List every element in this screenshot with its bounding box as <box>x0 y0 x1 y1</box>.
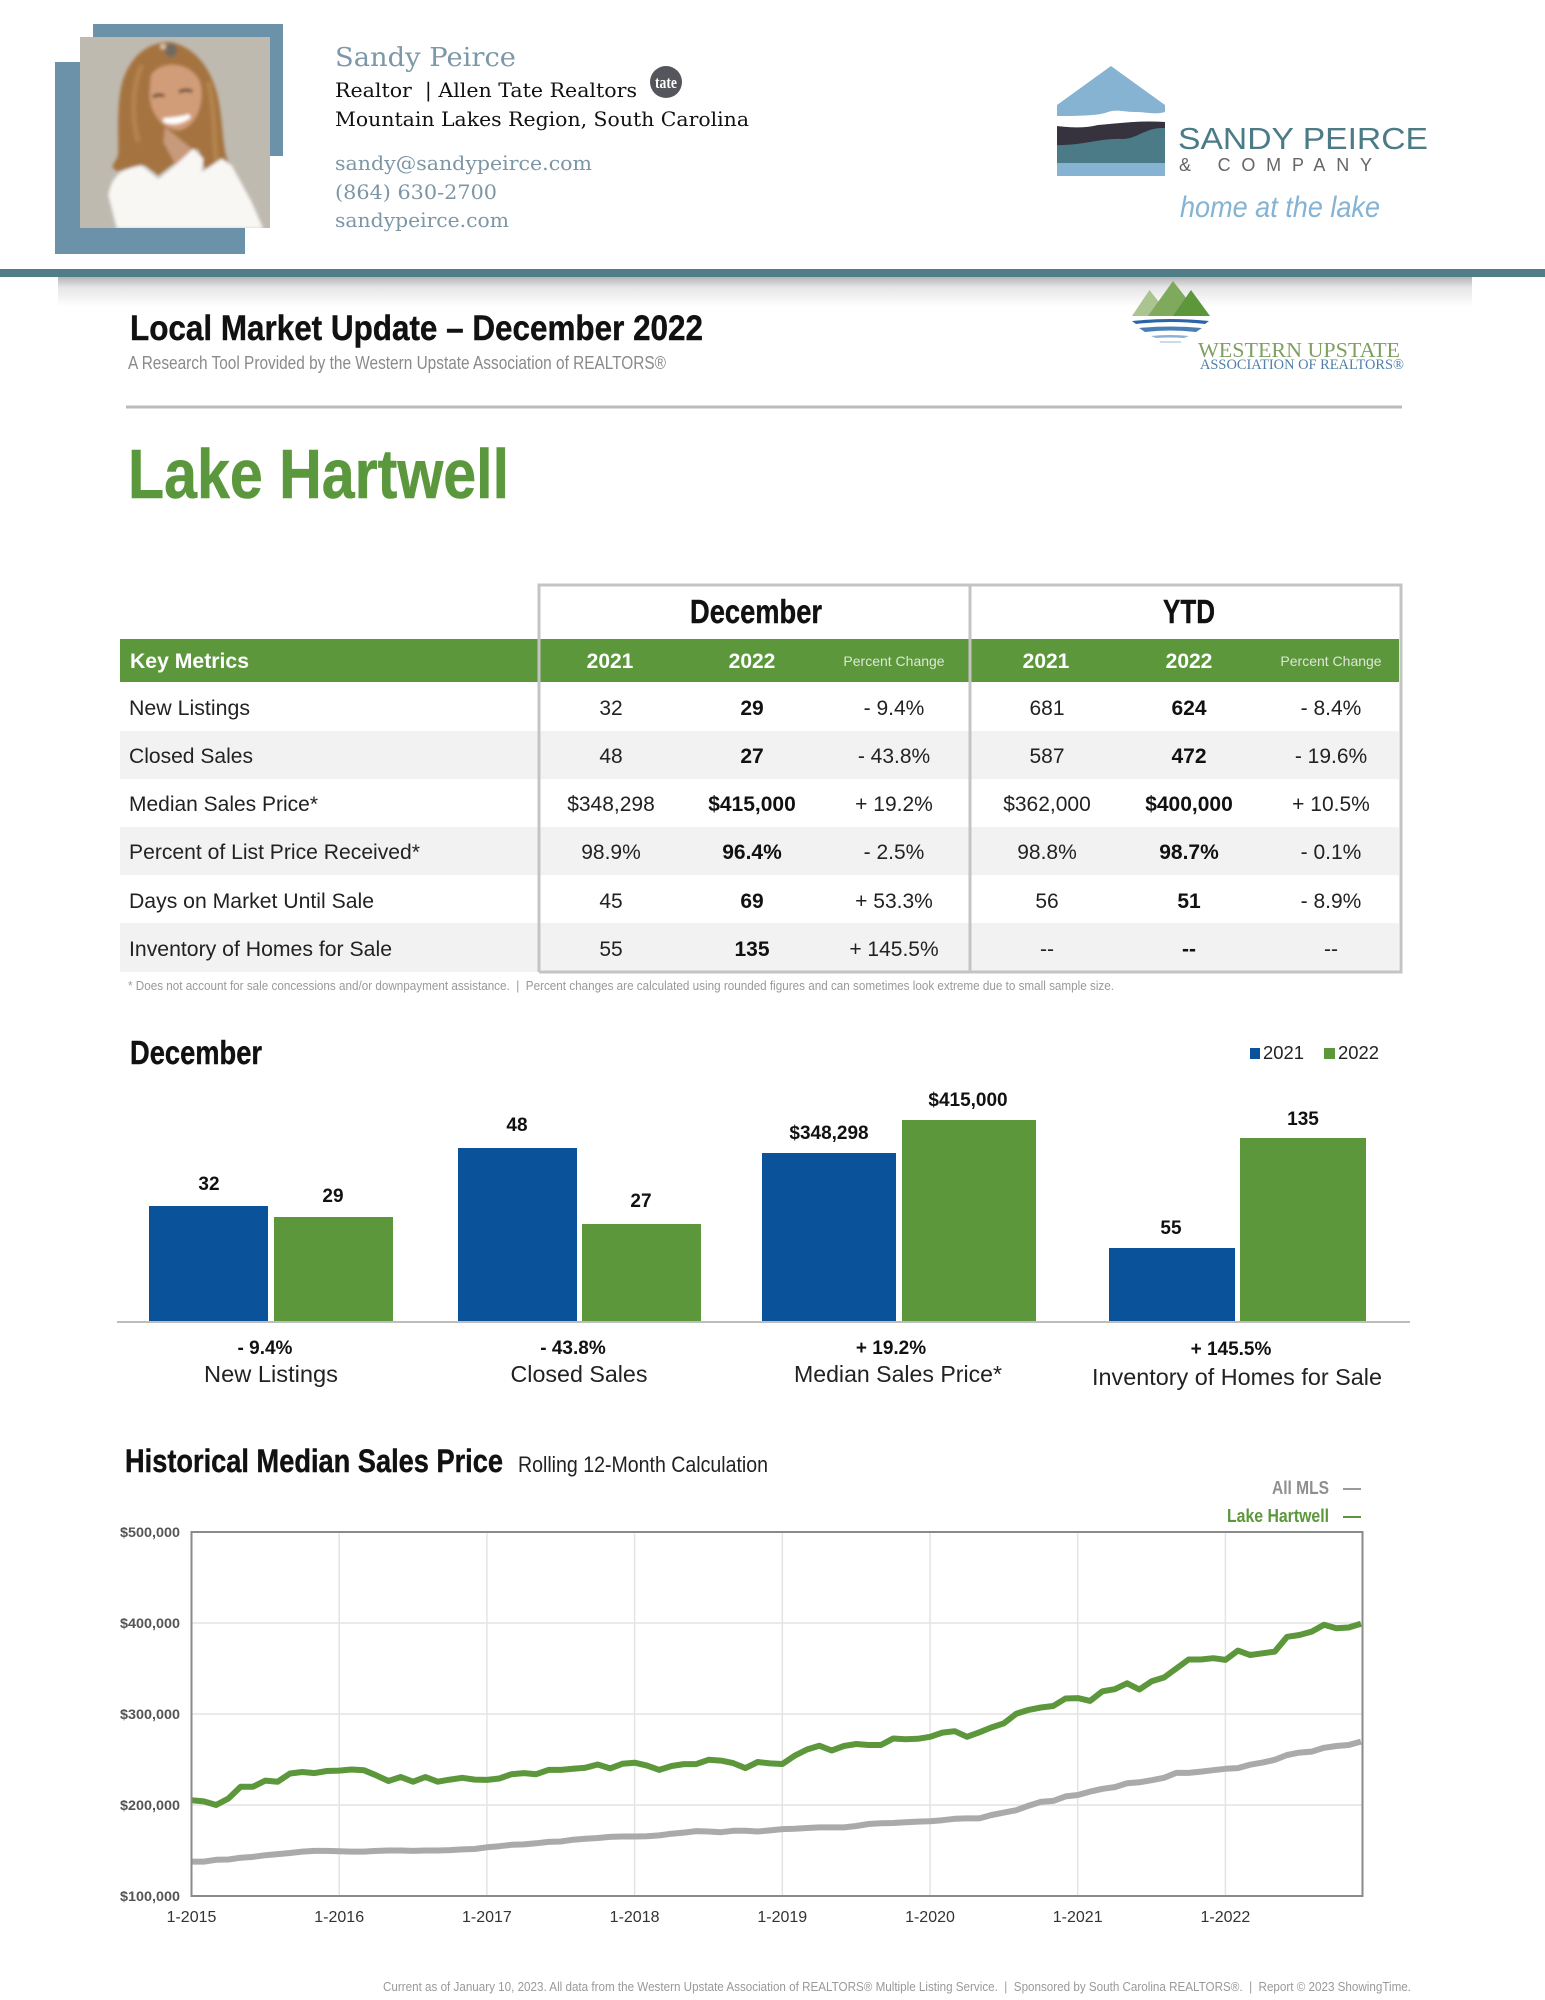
row: Median Sales Price: + 10.5% <box>1292 793 1370 816</box>
row: Closed Sales: Closed Sales <box>129 745 253 768</box>
row: Inventory of Homes for Sale: -- <box>1324 938 1338 961</box>
row: Days on Market Until Sale <box>129 890 1361 913</box>
row: Percent of List Price Received <box>120 827 1399 875</box>
row: New Listings: - 8.4% <box>1301 697 1361 720</box>
agent role: Realtor | Allen Tate Realtors <box>335 78 637 103</box>
icon: Allen Tate badge: tate <box>655 73 677 92</box>
row: Percent of List Price Received: 96.4% <box>722 841 782 864</box>
icon: house and lake mark <box>1057 66 1165 176</box>
row: Median Sales Price: + 19.2% <box>855 793 933 816</box>
bar chart legend: 2021 <box>1263 1043 1304 1063</box>
table header row: 2022 <box>729 650 775 673</box>
series: Lake Hartwell <box>192 1624 1361 1805</box>
x-axis labels: 1-2018 <box>610 1909 660 1926</box>
agent portrait photo <box>80 37 270 229</box>
row: Inventory of Homes for Sale: Inventory of Homes for Sale <box>129 938 392 961</box>
row: New Listings: 32 <box>599 697 623 720</box>
bars: Closed Sales <box>458 1115 701 1322</box>
caption: Median Sales Price: + 19.2% <box>856 1338 926 1359</box>
company name: SANDY PEIRCE <box>1178 121 1428 156</box>
table header row: 2022 <box>1166 650 1212 673</box>
row: Inventory of Homes for Sale: -- <box>1040 938 1054 961</box>
row: Inventory of Homes for Sale: 135 <box>734 938 770 961</box>
line chart legend: All MLS <box>1272 1478 1329 1498</box>
bars: Closed Sales: 48 <box>506 1115 528 1136</box>
row: Days on Market Until Sale: - 8.9% <box>1301 890 1361 913</box>
row: Days on Market Until Sale: + 53.3% <box>855 890 933 913</box>
tagline: home at the lake <box>1180 191 1380 224</box>
row: Percent of List Price Received: 98.9% <box>581 841 641 864</box>
caption: New Listings: New Listings <box>204 1361 338 1387</box>
caption: Closed Sales: Closed Sales <box>510 1361 648 1387</box>
line chart legend: Lake Hartwell <box>1227 1506 1329 1526</box>
row: Closed Sales: - 19.6% <box>1295 745 1367 768</box>
caption: Closed Sales <box>510 1338 648 1387</box>
caption: Closed Sales: - 43.8% <box>540 1338 606 1359</box>
caption: Inventory of Homes for Sale <box>1092 1339 1382 1390</box>
row: Closed Sales: 27 <box>740 745 764 768</box>
row: Median Sales Price: $348,298 <box>567 793 655 816</box>
row: Days on Market Until Sale: 56 <box>1035 890 1059 913</box>
caption: Inventory of Homes for Sale: Inventory of Homes for Sale <box>1092 1364 1382 1390</box>
bars: Inventory of Homes for Sale: 55 <box>1160 1218 1182 1239</box>
bars: Closed Sales: 27 <box>630 1191 652 1212</box>
bar chart section heading: December <box>130 1034 262 1071</box>
row: Percent of List Price Received: 98.7% <box>1159 841 1219 864</box>
agent header photo with frame <box>55 24 283 254</box>
row: New Listings <box>129 697 1361 720</box>
agent name: Sandy Peirce <box>335 43 516 73</box>
row: Days on Market Until Sale: Days on Market Until Sale <box>129 890 374 913</box>
row: Percent of List Price Received: Percent of List Price Received* <box>129 841 420 864</box>
y-axis labels: $500,000 <box>120 1524 180 1540</box>
row: Median Sales Price <box>129 793 1370 816</box>
y-axis labels <box>120 1524 180 1904</box>
x-axis labels: 1-2019 <box>757 1909 807 1926</box>
logo: Western Upstate Association of Realtors <box>1132 281 1404 373</box>
caption: Median Sales Price: Median Sales Price* <box>794 1361 1002 1387</box>
series: All MLS <box>192 1742 1361 1862</box>
y-axis labels: $300,000 <box>120 1706 180 1722</box>
y-axis labels: $100,000 <box>120 1888 180 1904</box>
key metrics table <box>120 585 1401 972</box>
table header row: Key Metrics <box>130 650 249 673</box>
bars: Median Sales Price: $348,298 <box>789 1123 869 1144</box>
line chart heading: Historical Median Sales Price <box>125 1443 503 1479</box>
caption: Inventory of Homes for Sale: + 145.5% <box>1191 1339 1272 1360</box>
bars: New Listings <box>149 1174 393 1322</box>
report subtitle: A Research Tool Provided by the Western Upstate Association of REALTORS® <box>128 353 666 373</box>
agent contact details <box>335 43 749 232</box>
y-axis labels: $200,000 <box>120 1797 180 1813</box>
row: Days on Market Until Sale: 45 <box>599 890 623 913</box>
table header row: 2021 <box>587 650 634 673</box>
table header row <box>120 639 1399 682</box>
bars: Inventory of Homes for Sale <box>1109 1109 1366 1322</box>
report title: Local Market Update – December 2022 <box>130 309 703 348</box>
line chart subheading: Rolling 12-Month Calculation <box>518 1452 768 1477</box>
row: Median Sales Price: Median Sales Price* <box>129 793 318 816</box>
y-axis labels: $400,000 <box>120 1615 180 1631</box>
agent region: Mountain Lakes Region, South Carolina <box>335 107 749 131</box>
caption: New Listings <box>204 1338 338 1387</box>
row: Median Sales Price: $362,000 <box>1003 793 1091 816</box>
row: Closed Sales: 472 <box>1171 745 1207 768</box>
bar chart legend <box>1250 1043 1379 1063</box>
x-axis labels: 1-2015 <box>167 1909 217 1926</box>
row: New Listings: 681 <box>1029 697 1065 720</box>
bar chart legend: 2022 <box>1338 1043 1379 1063</box>
x-axis labels: 1-2020 <box>905 1909 955 1926</box>
agent email: sandy@sandypeirce.com <box>335 151 592 175</box>
bars: Median Sales Price: $415,000 <box>928 1090 1008 1111</box>
row: Days on Market Until Sale: 51 <box>1177 890 1201 913</box>
bar chart <box>117 1090 1410 1390</box>
row: Percent of List Price Received: 98.8% <box>1017 841 1077 864</box>
row: Inventory of Homes for Sale <box>120 923 1399 972</box>
row: New Listings: New Listings <box>129 697 250 720</box>
x-axis labels: 1-2016 <box>314 1909 364 1926</box>
x-axis labels: 1-2017 <box>462 1909 512 1926</box>
location heading: Lake Hartwell <box>128 435 509 513</box>
row: New Listings: 29 <box>740 697 764 720</box>
row: Closed Sales: - 43.8% <box>858 745 930 768</box>
bars: New Listings: 29 <box>322 1186 344 1207</box>
agent phone: (864) 630-2700 <box>335 180 497 204</box>
row: Closed Sales <box>120 731 1399 779</box>
row: Median Sales Price: $415,000 <box>708 793 796 816</box>
table footnote: * Does not account for sale concessions and/or downpayment assistance. | Percent changes are calculated using rounded figures and can sometimes look extreme due to small sample size. <box>128 978 1114 993</box>
row: Days on Market Until Sale: 69 <box>740 890 764 913</box>
table header row: Percent Change <box>843 653 945 669</box>
row: New Listings: - 9.4% <box>864 697 924 720</box>
company sub-name: & COMPANY <box>1179 155 1372 175</box>
association name line 2: ASSOCIATION OF REALTORS® <box>1200 357 1404 373</box>
bars: Inventory of Homes for Sale: 135 <box>1287 1109 1319 1130</box>
row: Inventory of Homes for Sale: 55 <box>599 938 623 961</box>
caption: New Listings: - 9.4% <box>238 1338 293 1359</box>
table header row: 2021 <box>1023 650 1070 673</box>
line chart <box>120 1524 1362 1926</box>
x-axis labels: 1-2022 <box>1200 1909 1250 1926</box>
x-axis labels <box>167 1909 1250 1926</box>
agent website: sandypeirce.com <box>335 208 509 232</box>
association name line 1: WESTERN UPSTATE <box>1198 338 1400 362</box>
period heading: YTD: YTD <box>1163 593 1215 630</box>
line chart legend <box>1227 1478 1361 1526</box>
row: New Listings: 624 <box>1171 697 1207 720</box>
row: Median Sales Price: $400,000 <box>1145 793 1233 816</box>
x-axis labels: 1-2021 <box>1053 1909 1103 1926</box>
bars: Median Sales Price <box>762 1090 1036 1322</box>
table header row: Percent Change <box>1280 653 1382 669</box>
header divider band <box>0 269 1545 277</box>
period heading: December: December <box>690 593 822 630</box>
row: Closed Sales: 48 <box>599 745 623 768</box>
logo: Sandy Peirce and Company <box>1057 66 1428 224</box>
bars: New Listings: 32 <box>198 1174 220 1195</box>
row: Inventory of Homes for Sale: + 145.5% <box>849 938 939 961</box>
row: Percent of List Price Received: - 0.1% <box>1301 841 1361 864</box>
icon: mountains and water <box>1132 281 1210 342</box>
band shadow <box>58 277 1472 307</box>
icon: Allen Tate badge <box>650 66 682 98</box>
row: Closed Sales: 587 <box>1029 745 1065 768</box>
page footer source note: Current as of January 10, 2023. All data from the Western Upstate Association of REALTORS® Multiple Listing Service. | Sponsored by South Carolina REALTORS®. | Report © 2023 ShowingTime. <box>383 1979 1411 1994</box>
caption: Median Sales Price <box>794 1338 1002 1387</box>
row: Percent of List Price Received: - 2.5% <box>864 841 924 864</box>
row: Inventory of Homes for Sale: -- <box>1182 938 1196 961</box>
